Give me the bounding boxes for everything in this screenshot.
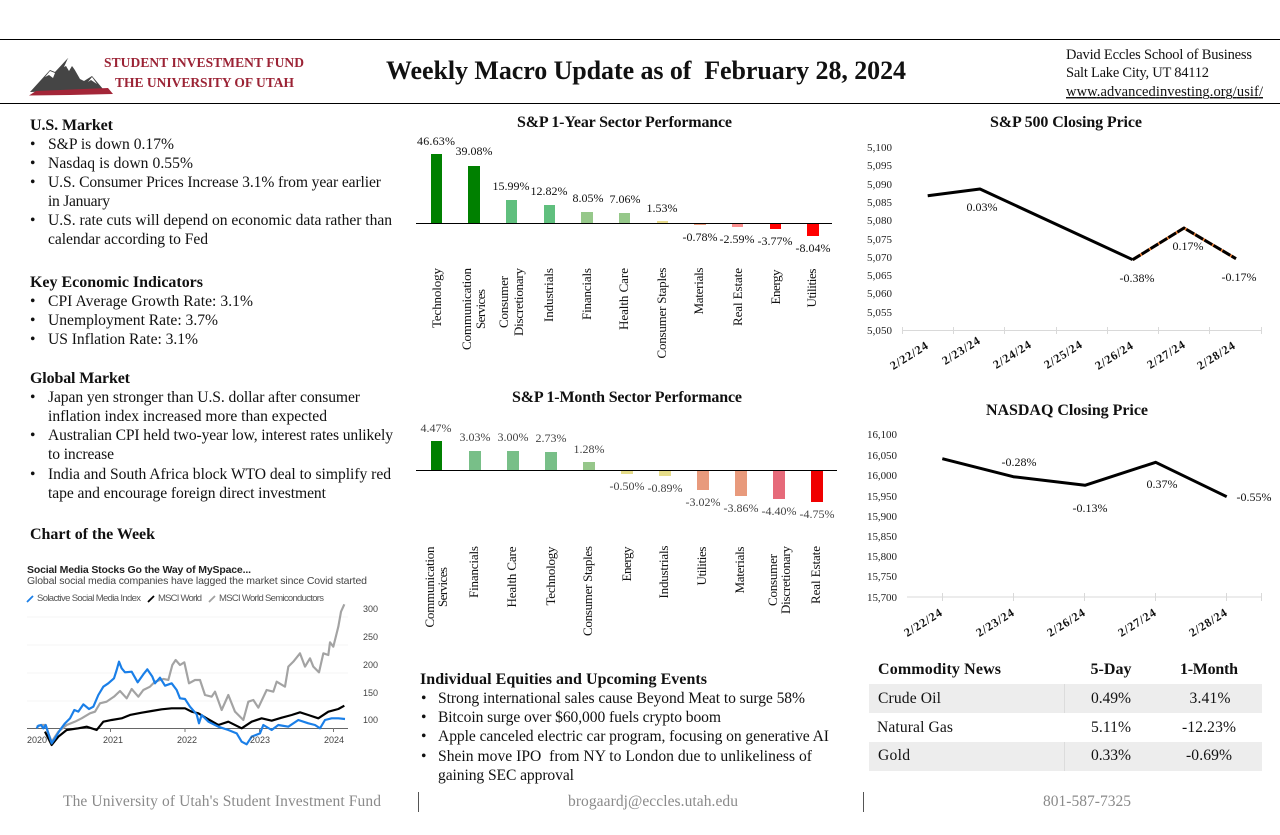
y axis labels: NASDAQ: 15,850 xyxy=(867,531,898,543)
point labels: NASDAQ: 0.37% xyxy=(1146,477,1178,491)
bullet list: equities: Bitcoin surge over $60,000 fuels crypto boom xyxy=(438,709,721,726)
category labels: 1-month: Consumer xyxy=(765,553,780,606)
category labels: 1-month: Services xyxy=(435,567,450,607)
line chart: social media vs market: 2024 xyxy=(324,735,344,745)
category labels: 1-year: Consumer Staples xyxy=(654,268,669,358)
line chart: social media vs market: 2022 xyxy=(177,735,197,745)
panel: Chart of the Week xyxy=(27,526,378,745)
bullet list: equities: • xyxy=(421,690,426,707)
category labels: 1-month: Financials xyxy=(466,546,481,598)
bullet list: Global Market: • xyxy=(30,427,35,444)
table header: 5-Day xyxy=(1090,661,1132,678)
x axis: S&P 500 xyxy=(902,327,1262,334)
date labels: S&P 500: 2/26/24 xyxy=(1092,339,1135,373)
value labels: 1-year: -2.59% xyxy=(720,232,754,246)
heading: Key Economic Indicators: Key Economic Indicators xyxy=(30,274,203,291)
value labels: 1-year: 7.06% xyxy=(610,192,640,206)
value labels: 1-month: -4.40% xyxy=(762,504,796,518)
value labels: 1-year: 12.82% xyxy=(530,184,568,198)
row: Crude Oil: 0.49% xyxy=(1091,690,1131,707)
y axis labels: S&P 500: 5,055 xyxy=(867,307,892,319)
bullet list: equities: • xyxy=(421,709,426,726)
point labels: NASDAQ: -0.55% xyxy=(1236,490,1272,504)
bullet list: U.S. Market xyxy=(30,136,392,248)
point labels: NASDAQ: -0.28% xyxy=(1002,455,1036,469)
date labels: S&P 500: 2/24/24 xyxy=(990,338,1033,372)
bullet list: Global Market: India and South Africa block WTO deal to simplify red xyxy=(48,466,391,483)
bullet list: Global Market: • xyxy=(30,466,35,483)
y axis labels: S&P 500: 5,095 xyxy=(867,160,892,172)
line chart: social media vs market: 2021 xyxy=(103,735,123,745)
row: Gold: Gold xyxy=(878,747,910,764)
y axis labels: NASDAQ: 15,800 xyxy=(867,551,898,563)
heading: Global Market: Global Market xyxy=(30,370,131,387)
value labels: 1-month: 1.28% xyxy=(574,442,604,456)
panel: Key Economic Indicators xyxy=(30,274,253,348)
line: NASDAQ close xyxy=(942,459,1227,497)
panel: S&P 1-Year Sector Performance xyxy=(416,114,832,358)
chart legend: MSCI World Semiconductors xyxy=(219,593,324,604)
bullet list: Global Market: inflation index increased more than expected xyxy=(48,408,327,425)
bullet list: indicators: CPI Average Growth Rate: 3.1% xyxy=(48,293,253,310)
logo text: STUDENT INVESTMENT FUND xyxy=(104,55,304,70)
panel: Individual Equities and Upcoming Events xyxy=(420,671,829,784)
row: Gold xyxy=(878,747,1232,764)
category labels: 1-year: Materials xyxy=(691,268,706,314)
x axis: NASDAQ xyxy=(907,593,1262,601)
y axis labels: NASDAQ: 16,100 xyxy=(867,429,898,441)
y axis labels: S&P 500: 5,060 xyxy=(867,288,892,300)
panel: U.S. Market xyxy=(30,117,392,248)
category labels: 1-year: Discretionary xyxy=(511,268,526,336)
heading: U.S. Market: U.S. Market xyxy=(30,117,114,134)
y axis labels: NASDAQ: 15,900 xyxy=(867,511,898,523)
date labels: NASDAQ: 2/22/24 xyxy=(901,606,944,640)
bullet list: Global Market: tape and encourage foreign direct investment xyxy=(48,485,327,502)
y axis labels: S&P 500: 5,075 xyxy=(867,234,892,246)
line chart: social media vs market: 200 xyxy=(363,660,378,670)
row: Crude Oil: 3.41% xyxy=(1190,690,1230,707)
logo: Student Investment Fund xyxy=(29,55,304,96)
bullet list: equities: gaining SEC approval xyxy=(438,767,575,784)
category labels: 1-year: Technology xyxy=(429,268,444,328)
chart subtitle: Global social media companies have lagged the market since Covid started xyxy=(27,575,367,587)
date labels: S&P 500 xyxy=(887,334,1237,373)
bullet list: U.S. Market: • xyxy=(30,155,35,172)
bullet list: Global Market: Japan yen stronger than U.S. dollar after consumer xyxy=(48,389,361,406)
heading: 1-month chart: S&P 1-Month Sector Performance xyxy=(512,389,742,406)
heading: NASDAQ chart: NASDAQ Closing Price xyxy=(986,402,1148,419)
bullet list: U.S. Market: S&P is down 0.17% xyxy=(48,136,174,153)
line chart: social media vs market: 150 xyxy=(363,688,378,698)
bullet list: equities: • xyxy=(421,728,426,745)
y axis labels: S&P 500: 5,080 xyxy=(867,215,892,227)
category labels: 1-year: Energy xyxy=(768,269,783,304)
heading: Individual Equities: Individual Equities and Upcoming Events xyxy=(420,671,707,688)
category labels: 1-month: Materials xyxy=(732,546,747,594)
footer: phone: 801-587-7325 xyxy=(1043,793,1131,810)
value labels: 1-year: 46.63% xyxy=(417,134,455,148)
bullet list: indicators: • xyxy=(30,331,35,348)
date labels: NASDAQ: 2/23/24 xyxy=(973,606,1016,640)
category labels: 1-year: Financials xyxy=(579,268,594,320)
line chart: social media vs market: 300 xyxy=(363,604,378,614)
value labels: 1-year: -3.77% xyxy=(758,234,792,248)
bars: 1-year xyxy=(416,154,832,236)
y axis labels: NASDAQ xyxy=(867,429,898,604)
bullet list: U.S. Market: U.S. Consumer Prices Increase 3.1% from year earlier xyxy=(48,174,382,191)
point labels: NASDAQ: -0.13% xyxy=(1072,501,1108,515)
category labels: 1-month: Industrials xyxy=(656,546,671,598)
category labels: 1-month: Utilities xyxy=(694,546,709,586)
bullet list: equities: • xyxy=(421,748,426,765)
value labels: 1-month: 3.00% xyxy=(498,430,528,444)
line chart: social media vs market: 2020 xyxy=(27,735,47,745)
date labels: S&P 500: 2/22/24 xyxy=(887,339,930,373)
value labels: 1-month: -3.02% xyxy=(686,495,720,509)
value labels: 1-month: -3.86% xyxy=(724,501,758,515)
icon: mountain xyxy=(29,58,113,96)
point labels: NASDAQ xyxy=(1002,455,1272,515)
category labels: 1-year: Real Estate xyxy=(730,268,745,326)
bullet list: U.S. Market: calendar according to Fed xyxy=(48,231,208,248)
category labels: 1-year: Services xyxy=(473,289,488,329)
value labels: 1-year: -0.78% xyxy=(682,230,718,244)
bullet list: U.S. Market: • xyxy=(30,136,35,153)
y axis labels: S&P 500 xyxy=(867,142,892,337)
row: Natural Gas: 5.11% xyxy=(1091,719,1131,736)
category labels: 1-month: Technology xyxy=(543,546,558,606)
bullet list: Global Market: Australian CPI held two-year low, interest rates unlikely xyxy=(48,427,393,444)
address block: Salt Lake City, UT 84112 xyxy=(1066,65,1209,81)
bullet list: indicators: • xyxy=(30,293,35,310)
category labels: 1-year: Communication xyxy=(459,268,474,350)
line chart: social media vs market: 100 xyxy=(363,715,378,725)
y axis labels: S&P 500: 5,050 xyxy=(867,325,892,337)
category labels: 1-month xyxy=(422,546,823,636)
y axis labels: NASDAQ: 15,950 xyxy=(867,491,898,503)
date labels: S&P 500: 2/25/24 xyxy=(1041,338,1084,372)
bullet list: indicators: Unemployment Rate: 3.7% xyxy=(48,312,218,329)
bullet list: U.S. Market: • xyxy=(30,212,35,229)
category labels: 1-year xyxy=(429,268,819,358)
date labels: NASDAQ: 2/27/24 xyxy=(1115,606,1158,640)
bullet list: equities: Shein move IPO from NY to London due to unlikeliness of xyxy=(438,748,813,765)
category labels: 1-month: Health Care xyxy=(504,546,519,608)
chart legend: Solactive Social Media Index xyxy=(37,593,141,604)
category labels: 1-month: Real Estate xyxy=(808,546,823,604)
y axis labels: S&P 500: 5,090 xyxy=(867,179,892,191)
category labels: 1-month: Consumer Staples xyxy=(580,546,595,636)
y axis labels: NASDAQ: 15,700 xyxy=(867,592,898,604)
bullet list: Global Market xyxy=(30,389,393,502)
line: S&P 500 close xyxy=(928,189,1236,260)
y axis labels: S&P 500: 5,085 xyxy=(867,197,892,209)
table header xyxy=(878,661,1238,678)
bullet list: Global Market: • xyxy=(30,389,35,406)
value labels: 1-month: -0.50% xyxy=(610,479,644,493)
bars: 1-month xyxy=(416,441,837,502)
category labels: 1-year: Health Care xyxy=(616,268,631,330)
point labels: S&P 500: 0.03% xyxy=(966,200,998,214)
chart title: Social Media Stocks Go the Way of MySpace... xyxy=(27,564,251,576)
line chart: social media vs market: 250 xyxy=(363,632,378,642)
category labels: 1-month: Communication xyxy=(422,546,437,628)
table: Commodity News xyxy=(869,661,1262,771)
y axis labels: NASDAQ: 15,750 xyxy=(867,571,898,583)
bullet list: U.S. Market: Nasdaq is down 0.55% xyxy=(48,155,193,172)
y axis labels: S&P 500: 5,100 xyxy=(867,142,892,154)
bullet list: U.S. Market: U.S. rate cuts will depend on economic data rather than xyxy=(48,212,392,229)
value labels: 1-month xyxy=(420,421,834,521)
row: Gold: -0.69% xyxy=(1186,747,1232,764)
footer: fund name: The University of Utah's Student Investment Fund xyxy=(63,793,381,810)
row: Gold: 0.33% xyxy=(1091,747,1131,764)
y axis labels: S&P 500: 5,065 xyxy=(867,270,892,282)
bullet list: equities: Strong international sales cause Beyond Meat to surge 58% xyxy=(438,690,805,707)
panel: S&P 500 Closing Price xyxy=(867,114,1262,373)
bullet list: indicators: US Inflation Rate: 3.1% xyxy=(48,331,198,348)
value labels: 1-month: -0.89% xyxy=(648,481,682,495)
logo text: THE UNIVERSITY OF UTAH xyxy=(115,75,294,90)
bullet list: indicators: • xyxy=(30,312,35,329)
panel: NASDAQ Closing Price xyxy=(867,402,1272,640)
line chart: social media vs market xyxy=(27,604,378,745)
date labels: NASDAQ: 2/28/24 xyxy=(1186,606,1229,640)
category labels: 1-year: Utilities xyxy=(804,268,819,308)
bullet list: U.S. Market: in January xyxy=(48,193,110,210)
address block xyxy=(1066,47,1264,100)
footer: email: brogaardj@eccles.utah.edu xyxy=(568,793,738,810)
panel: S&P 1-Month Sector Performance xyxy=(416,389,837,636)
value labels: 1-year: 1.53% xyxy=(646,201,678,215)
row: Crude Oil xyxy=(878,690,1230,707)
address block: David Eccles School of Business xyxy=(1066,47,1252,63)
row: Crude Oil: Crude Oil xyxy=(878,690,942,707)
row: Natural Gas xyxy=(877,719,1236,736)
title: Weekly Macro Update as of February 28, 2024 xyxy=(386,56,906,85)
y axis labels: S&P 500: 5,070 xyxy=(867,252,892,264)
line chart: social media vs market: 2023 xyxy=(250,735,270,745)
value labels: 1-year: 39.08% xyxy=(456,144,492,158)
bullet list: Global Market: to increase xyxy=(48,446,114,463)
value labels: 1-month: -4.75% xyxy=(800,507,834,521)
point labels: S&P 500: 0.17% xyxy=(1172,239,1204,253)
value labels: 1-year: 8.05% xyxy=(572,191,604,205)
heading: Chart of the Week: Chart of the Week xyxy=(30,526,155,543)
table header: 1-Month xyxy=(1180,661,1238,678)
row: Natural Gas: Natural Gas xyxy=(877,719,953,736)
heading: 1-year chart: S&P 1-Year Sector Performance xyxy=(517,114,732,131)
date labels: NASDAQ: 2/26/24 xyxy=(1044,606,1087,640)
panel: Global Market xyxy=(30,370,393,502)
table header: Commodity News xyxy=(878,661,1001,678)
heading: S&P 500 chart: S&P 500 Closing Price xyxy=(990,114,1142,131)
value labels: 1-year xyxy=(417,134,830,255)
chart legend xyxy=(27,593,324,604)
logo text xyxy=(104,55,304,90)
value labels: 1-year: -8.04% xyxy=(796,241,830,255)
y axis labels: NASDAQ: 16,000 xyxy=(867,470,898,482)
date labels: S&P 500: 2/28/24 xyxy=(1194,339,1237,373)
y axis labels: NASDAQ: 16,050 xyxy=(867,450,898,462)
bullet list: equities xyxy=(421,690,829,784)
value labels: 1-year: 15.99% xyxy=(492,179,530,193)
date labels: S&P 500: 2/27/24 xyxy=(1144,338,1187,372)
bullet list: indicators xyxy=(30,293,253,348)
address block: www.advancedinvesting.org/usif/ xyxy=(1066,84,1264,100)
category labels: 1-year: Consumer xyxy=(496,275,511,328)
value labels: 1-month: 4.47% xyxy=(420,421,452,435)
category labels: 1-month: Discretionary xyxy=(778,546,793,614)
point labels: S&P 500: -0.17% xyxy=(1222,270,1256,284)
row: Natural Gas: -12.23% xyxy=(1182,719,1236,736)
value labels: 1-month: 3.03% xyxy=(460,430,490,444)
bullet list: U.S. Market: • xyxy=(30,174,35,191)
category labels: 1-month: Energy xyxy=(619,546,634,582)
footer xyxy=(63,792,1131,812)
chart legend: MSCI World xyxy=(158,593,202,604)
bullet list: equities: Apple canceled electric car program, focusing on generative AI xyxy=(438,728,829,745)
date labels: S&P 500: 2/23/24 xyxy=(939,334,982,368)
value labels: 1-month: 2.73% xyxy=(536,431,566,445)
category labels: 1-year: Industrials xyxy=(541,268,556,322)
point labels: S&P 500: -0.38% xyxy=(1120,271,1154,285)
date labels: NASDAQ xyxy=(901,606,1229,640)
point labels: S&P 500 xyxy=(966,200,1256,285)
